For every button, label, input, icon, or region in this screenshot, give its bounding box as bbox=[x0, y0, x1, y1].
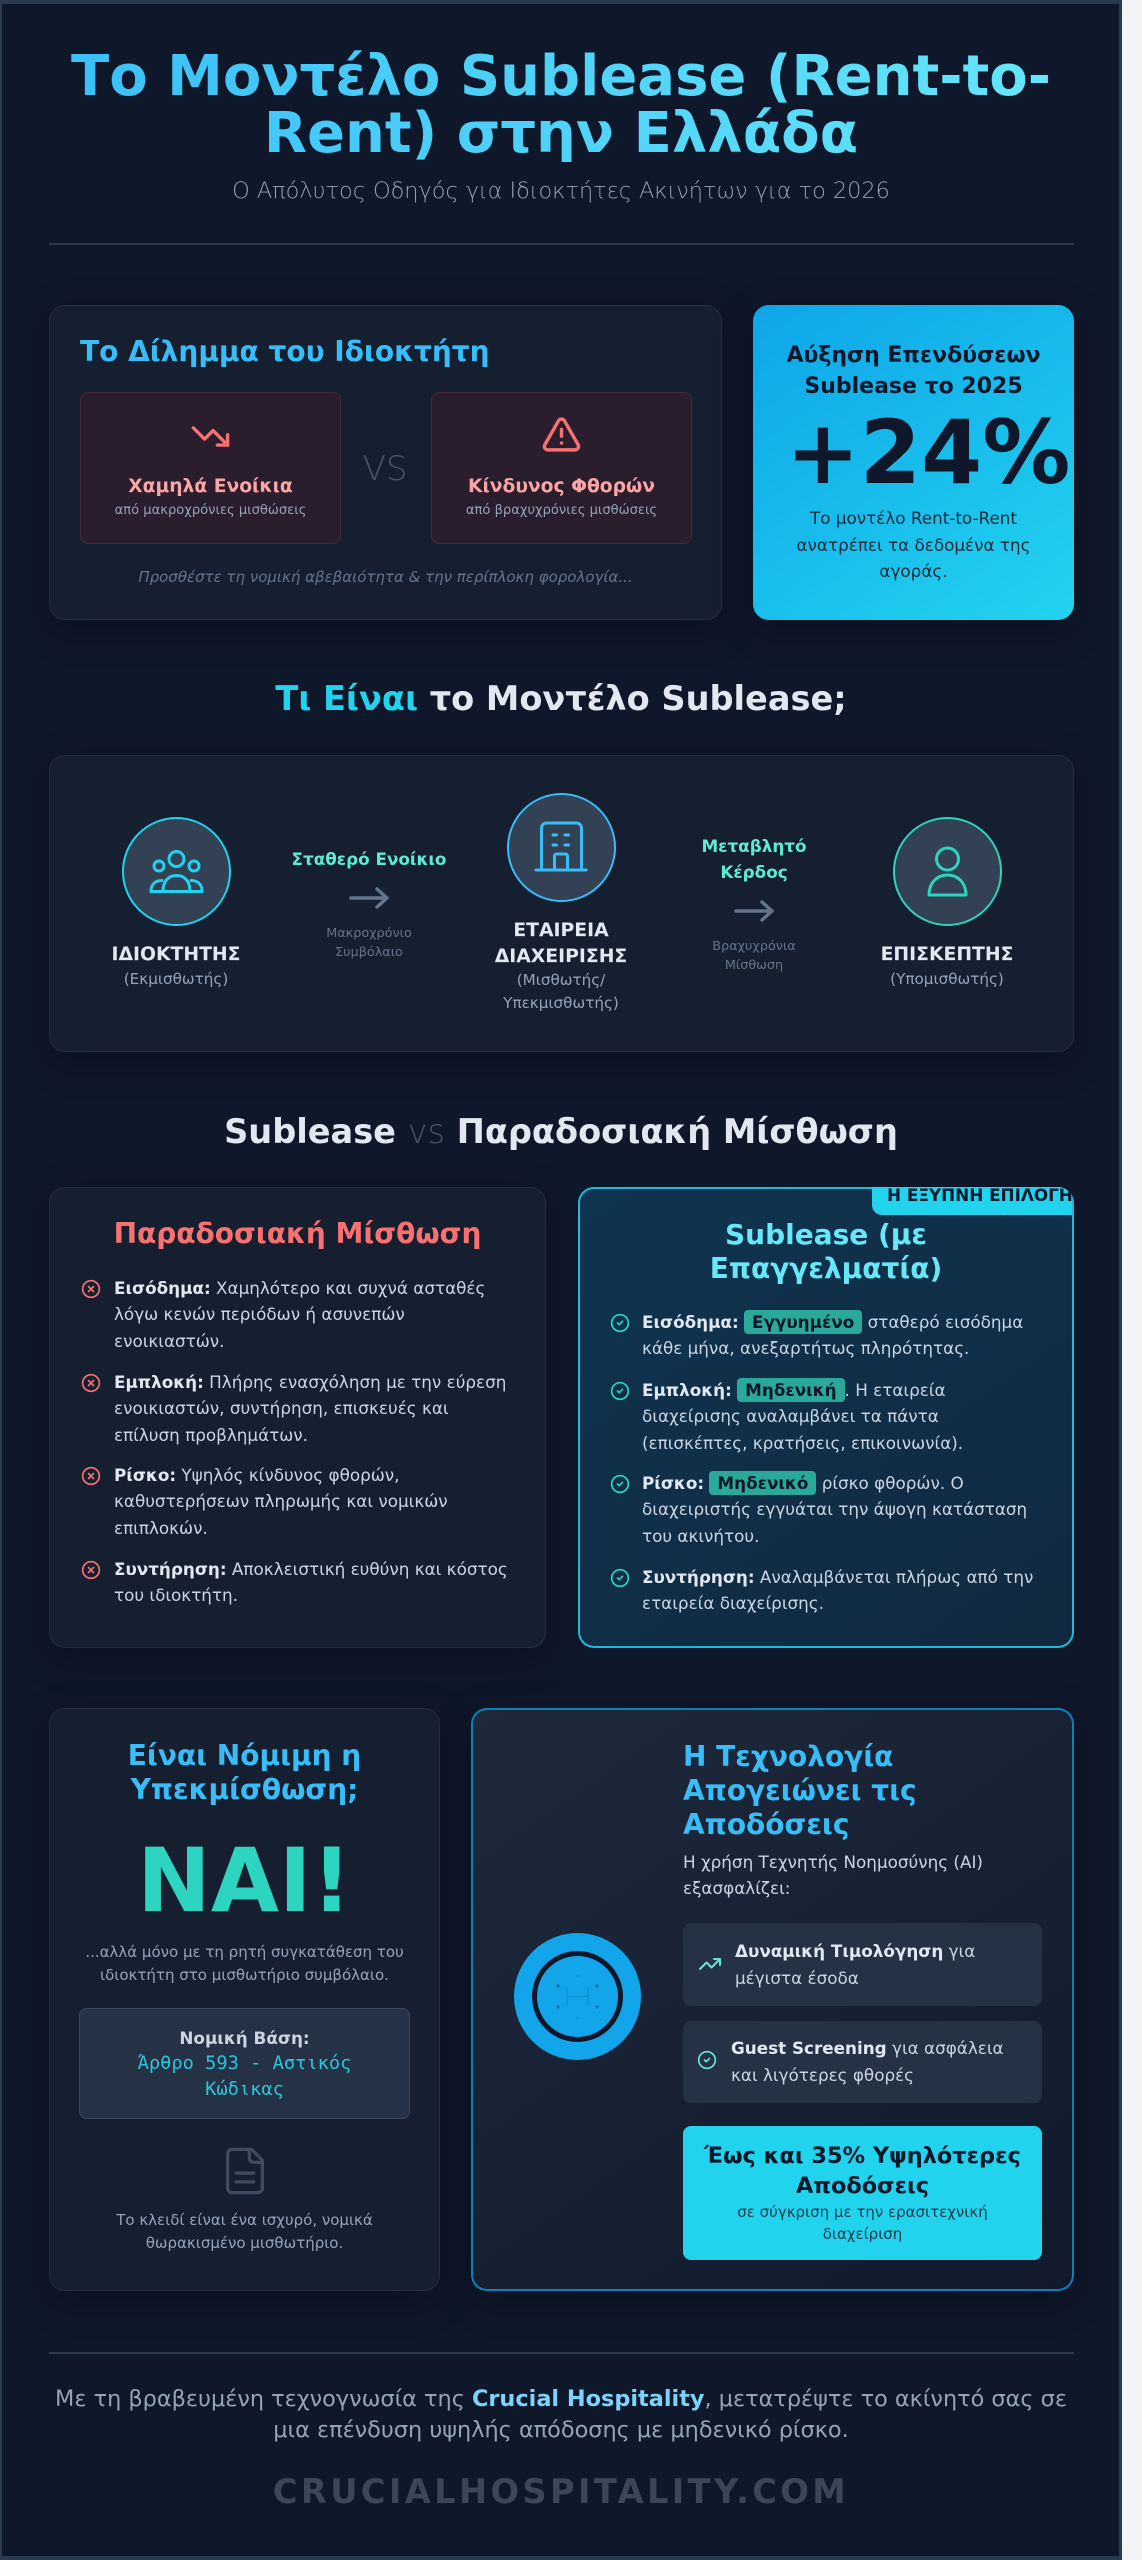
stat heading: Sublease το 2025 bbox=[804, 374, 1023, 398]
label bbox=[494, 920, 627, 967]
icon: trending up bbox=[698, 1952, 722, 1976]
item: risk: καθυστερήσεων πληρωμής και νομικών bbox=[114, 1491, 448, 1511]
icon: warning triangle bbox=[542, 417, 580, 452]
stat note: ανατρέπει τα δεδομένα της bbox=[796, 534, 1030, 554]
item: income: Εισόδημα: Εγγυημένο σταθερό εισόδημα bbox=[642, 1312, 1023, 1332]
card text bbox=[735, 1938, 975, 1991]
closing note bbox=[49, 2209, 440, 2255]
panel: flow diagram bbox=[49, 755, 1074, 1052]
card title: Κίνδυνος Φθορών bbox=[468, 476, 655, 497]
icon: check bbox=[610, 1568, 630, 1588]
box title: Νομική Βάση: bbox=[179, 2028, 310, 2048]
icon: check bbox=[697, 2050, 717, 2070]
card title: Χαμηλά Ενοίκια bbox=[128, 476, 293, 497]
law reference bbox=[79, 2051, 410, 2102]
panel heading bbox=[128, 1739, 361, 1806]
panel: technology bbox=[471, 1708, 1074, 2291]
italic note: Προσθέστε τη νομική αβεβαιότητα & την περίπλοκη φορολογία... bbox=[138, 568, 633, 586]
subtitle: Ο Απόλυτος Οδηγός για Ιδιοκτήτες Ακινήτων για το 2026 bbox=[232, 178, 890, 204]
callout title bbox=[683, 2141, 1042, 2201]
sublabel: (Υπομισθωτής) bbox=[890, 970, 1004, 988]
node: guest bbox=[881, 817, 1013, 988]
panel heading: Sublease (με bbox=[725, 1218, 927, 1251]
card text: μέγιστα έσοδα bbox=[735, 1968, 859, 1988]
sublabel: (Εκμισθωτής) bbox=[124, 970, 228, 988]
node: owner bbox=[112, 817, 240, 988]
sublabel bbox=[503, 971, 619, 1012]
panel: legality bbox=[49, 1708, 440, 2291]
item: involvement: (επισκέπτες, κρατήσεις, επικοινωνία). bbox=[642, 1433, 963, 1453]
title bbox=[0, 48, 1122, 162]
panel heading: Επαγγελματία) bbox=[710, 1252, 942, 1285]
sublabel: (Μισθωτής/ bbox=[517, 971, 605, 989]
item: maintenance: εταιρεία διαχείρισης. bbox=[642, 1593, 824, 1613]
vs label: VS bbox=[363, 449, 407, 489]
card text: και λιγότερες φθορές bbox=[731, 2064, 914, 2084]
card: damage risk bbox=[431, 392, 692, 544]
label: ΕΤΑΙΡΕΙΑ bbox=[513, 920, 609, 941]
closing note: Το κλειδί είναι ένα ισχυρό, νομικά bbox=[116, 2211, 373, 2229]
legal basis box bbox=[79, 2008, 410, 2119]
card: low rents bbox=[80, 392, 341, 544]
caveat: ...αλλά μόνο με τη ρητή συγκατάθεση του bbox=[85, 1943, 404, 1961]
icon: x bbox=[82, 1466, 100, 1486]
icon: x bbox=[82, 1560, 100, 1580]
item: maintenance bbox=[610, 1567, 1033, 1613]
arrow: fixed rent bbox=[292, 849, 446, 960]
arrow label: Κέρδος bbox=[720, 862, 788, 882]
intro: εξασφαλίζει: bbox=[683, 1878, 790, 1898]
stat note: αγοράς. bbox=[879, 561, 948, 581]
item: maintenance: Συντήρηση: Αποκλειστική ευθύνη και κόστος bbox=[114, 1559, 508, 1579]
panel: the owner's dilemma bbox=[49, 305, 722, 620]
item: income bbox=[82, 1278, 485, 1351]
ribbon: smart choice bbox=[872, 1187, 1072, 1215]
stat note bbox=[796, 508, 1030, 581]
callout title: Έως και 35% Υψηλότερες bbox=[704, 2143, 1021, 2169]
icon: building bbox=[507, 793, 616, 902]
arrow icon bbox=[734, 900, 774, 922]
panel heading: Αποδόσεις bbox=[683, 1808, 849, 1841]
icon: x bbox=[82, 1374, 100, 1392]
item: involvement: επίλυση προβλημάτων. bbox=[114, 1425, 308, 1445]
arrow note: Μίσθωση bbox=[725, 958, 783, 973]
stat note: Το μοντέλο Rent-to-Rent bbox=[810, 508, 1017, 528]
card: dynamic pricing bbox=[683, 1923, 1042, 2006]
footer statement: μια επένδυση υψηλής απόδοσης με μηδενικό ρίσκο. bbox=[273, 2417, 849, 2443]
arrow icon bbox=[349, 887, 389, 909]
item: risk: διαχειριστής εγγυάται την άψογη κατάσταση bbox=[642, 1499, 1027, 1519]
card text bbox=[731, 2035, 1004, 2088]
card note: από βραχυχρόνιες μισθώσεις bbox=[466, 503, 657, 518]
icon: group of people bbox=[122, 817, 231, 926]
footer statement: Με τη βραβευμένη τεχνογνωσία της Crucial Hospitality, μετατρέψτε το ακίνητό σας σε bbox=[55, 2386, 1067, 2412]
caveat: ιδιοκτήτη στο μισθωτήριο συμβόλαιο. bbox=[100, 1966, 389, 1984]
arrow note: Βραχυχρόνια bbox=[712, 939, 796, 954]
callout title: Αποδόσεις bbox=[796, 2173, 929, 2199]
icon: check bbox=[610, 1314, 630, 1332]
card note: από μακροχρόνιες μισθώσεις bbox=[115, 503, 306, 518]
icon: check bbox=[610, 1382, 630, 1400]
item: risk bbox=[82, 1465, 448, 1538]
callout note bbox=[683, 2201, 1042, 2245]
panel heading bbox=[683, 1740, 917, 1841]
item: income: Εισόδημα: Χαμηλότερο και συχνά ασταθές bbox=[114, 1278, 485, 1298]
item: income: λόγω κενών περιόδων ή ασυνεπών bbox=[114, 1304, 405, 1324]
item: maintenance: Συντήρηση: Αναλαμβάνεται πλήρως από την bbox=[642, 1567, 1033, 1587]
callout note: σε σύγκριση με την ερασιτεχνική bbox=[737, 2203, 988, 2221]
item: risk: του ακινήτου. bbox=[642, 1526, 759, 1546]
item: maintenance bbox=[82, 1559, 508, 1605]
item: risk: επιπλοκών. bbox=[114, 1518, 208, 1538]
item: income: ενοικιαστών. bbox=[114, 1331, 225, 1351]
arrow: variable profit bbox=[701, 836, 807, 973]
icon: hospitality emblem bbox=[514, 1932, 641, 2061]
law reference: Άρθρο 593 - Αστικός bbox=[138, 2053, 351, 2074]
stat heading: Αύξηση Επενδύσεων bbox=[786, 343, 1041, 368]
item: involvement bbox=[610, 1378, 963, 1453]
panel heading bbox=[710, 1218, 942, 1285]
panel: sublease bbox=[578, 1187, 1074, 1648]
callout note: διαχείριση bbox=[823, 2225, 902, 2243]
stat number: +24% bbox=[786, 401, 1070, 504]
big answer: ΝΑΙ! bbox=[137, 1829, 352, 1932]
heading: dilemma: Το Δίλημμα του Ιδιοκτήτη bbox=[80, 335, 490, 368]
panel heading: Απογειώνει τις bbox=[683, 1774, 917, 1807]
item: involvement: ενοικιαστών, συντήρηση, επισκευές και bbox=[114, 1398, 449, 1418]
title: Rent) στην Ελλάδα bbox=[264, 101, 858, 166]
item: involvement bbox=[82, 1372, 506, 1445]
icon: person bbox=[893, 817, 1002, 926]
panel heading: Υπεκμίσθωση; bbox=[131, 1773, 358, 1806]
callout: higher returns bbox=[683, 2126, 1042, 2260]
title: Το Μοντέλο Sublease (Rent-to- bbox=[71, 44, 1051, 109]
arrow note bbox=[712, 939, 796, 973]
item: risk: Ρίσκο: Υψηλός κίνδυνος φθορών, bbox=[114, 1465, 400, 1485]
arrow note: Μακροχρόνιο bbox=[326, 926, 412, 941]
icon: x bbox=[82, 1280, 100, 1298]
intro bbox=[683, 1849, 983, 1901]
icon: check bbox=[610, 1474, 630, 1494]
heading: what is sublease: Τι Είναι το Μοντέλο Sublease; bbox=[275, 679, 847, 718]
card text: Δυναμική Τιμολόγηση για bbox=[735, 1941, 975, 1961]
icon: document bbox=[219, 2145, 271, 2197]
item: risk bbox=[610, 1471, 1027, 1546]
item: involvement: Εμπλοκή: Πλήρης ενασχόληση με την εύρεση bbox=[114, 1372, 506, 1392]
item: risk: Ρίσκο: Μηδενικό ρίσκο φθορών. Ο bbox=[642, 1473, 964, 1493]
arrow label bbox=[701, 836, 807, 882]
arrow note bbox=[326, 926, 412, 960]
caveat bbox=[85, 1943, 404, 1984]
footer statement bbox=[0, 2384, 1122, 2446]
item: income bbox=[610, 1310, 1023, 1358]
intro: Η χρήση Τεχνητής Νοημοσύνης (AI) bbox=[683, 1852, 983, 1872]
panel heading: Είναι Νόμιμη η bbox=[128, 1739, 361, 1772]
label: ΕΠΙΣΚΕΠΤΗΣ bbox=[881, 944, 1013, 965]
arrow label: Μεταβλητό bbox=[701, 836, 807, 856]
panel heading: Παραδοσιακή Μίσθωση bbox=[114, 1217, 481, 1250]
law reference: Κώδικας bbox=[205, 2079, 284, 2100]
node: management company bbox=[494, 793, 627, 1012]
arrow note: Συμβόλαιο bbox=[335, 945, 403, 960]
footer brand: CRUCIALHOSPITALITY.COM bbox=[273, 2472, 849, 2511]
label: ΙΔΙΟΚΤΗΤΗΣ bbox=[112, 944, 240, 965]
closing note: θωρακισμένο μισθωτήριο. bbox=[146, 2234, 343, 2252]
arrow label: Σταθερό Ενοίκιο bbox=[292, 849, 446, 869]
stat heading bbox=[786, 343, 1041, 398]
icon: trending down bbox=[192, 426, 230, 447]
item: income: κάθε μήνα, ανεξαρτήτως πληρότητας. bbox=[642, 1338, 969, 1358]
label: ΔΙΑΧΕΙΡΙΣΗΣ bbox=[495, 946, 627, 967]
card: guest screening bbox=[683, 2021, 1042, 2103]
item: involvement: Εμπλοκή: Μηδενική . Η εταιρεία bbox=[642, 1380, 946, 1400]
panel heading: Η Τεχνολογία bbox=[683, 1740, 893, 1773]
stat card: +24% bbox=[753, 305, 1074, 620]
card text: Guest Screening για ασφάλεια bbox=[731, 2038, 1004, 2058]
heading: comparison: Sublease vs Παραδοσιακή Μίσθωση bbox=[224, 1112, 898, 1151]
sublabel: Υπεκμισθωτής) bbox=[503, 994, 619, 1012]
item: involvement: διαχείρισης αναλαμβάνει τα πάντα bbox=[642, 1406, 939, 1426]
panel: traditional lease bbox=[49, 1187, 546, 1648]
item: maintenance: του ιδιοκτήτη. bbox=[114, 1585, 238, 1605]
